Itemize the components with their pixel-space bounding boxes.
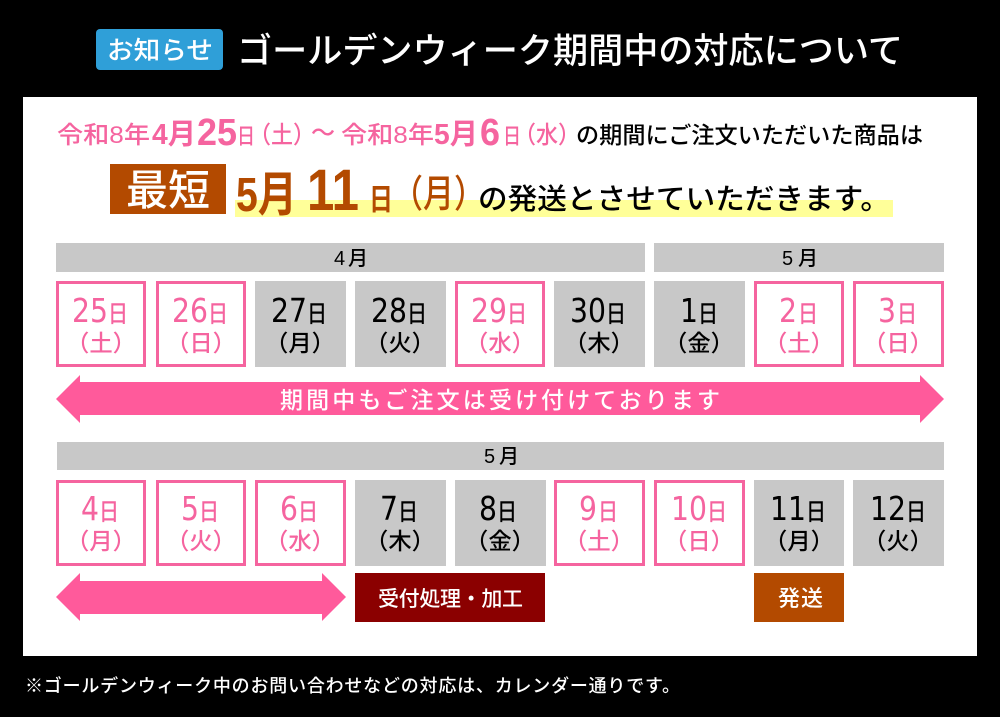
text: shipping date line: （月） (392, 174, 485, 216)
day: 25: 日 (108, 301, 128, 328)
text: shipping date line (236, 158, 890, 223)
arrow: May 4 to 6 (56, 573, 346, 621)
day: 28 (355, 281, 446, 367)
day: 5: （火） (166, 528, 236, 554)
day: 28: 28 (371, 291, 407, 330)
text: order period line: 5月 (434, 119, 478, 151)
day: 4: （月） (66, 528, 136, 554)
day: 10 (656, 482, 744, 564)
text: shipping date line: 日 (369, 184, 393, 217)
text: shipping date line: 11 (307, 158, 359, 223)
day: 27: 日 (307, 301, 327, 328)
month header: May second row: 5月 (484, 446, 519, 468)
day: 29: 29 (471, 291, 507, 330)
text: order period line: （水） (514, 122, 580, 149)
box: processing: 受付処理・加工 (378, 588, 523, 611)
day: 26 (158, 282, 244, 366)
day: 25 (58, 282, 144, 366)
highlight band (235, 200, 893, 217)
day: 10: 日 (707, 499, 727, 526)
day: 6: 6 (280, 489, 298, 528)
day: 1: （金） (664, 330, 734, 356)
day: 4: 4 (81, 489, 99, 528)
day: 11 (754, 480, 844, 566)
day: 4: 日 (99, 499, 119, 526)
day: 1: 1 (680, 291, 698, 330)
text: order period line: 6 (480, 112, 500, 154)
text: order period line: 令和8年 (341, 122, 434, 149)
day: 12: 12 (870, 489, 906, 528)
day: 30 (554, 281, 645, 367)
badge: お知らせ (96, 29, 223, 70)
day: 10: （日） (664, 528, 734, 554)
day: 12: （火） (863, 528, 933, 554)
title: ゴールデンウィーク期間中の対応について (237, 32, 903, 71)
text: order period line: 令和8年 (57, 122, 150, 149)
text: shipping date line: 5月 (236, 169, 297, 222)
text: order period line: 日 (503, 124, 521, 149)
day: 3: 日 (897, 301, 917, 328)
text: order period line: （土） (249, 122, 315, 149)
text: order period line: ～ (311, 120, 335, 147)
day: 9: 日 (598, 499, 618, 526)
day: 27: （月） (265, 330, 335, 356)
day: 8: （金） (465, 528, 535, 554)
day: 8: 8 (479, 489, 497, 528)
day: 29: 日 (507, 301, 527, 328)
arrow: orders accepted during period: 期間中もご注文は受け付けております (280, 387, 720, 413)
month header: May (654, 243, 944, 272)
day: 27: 27 (271, 291, 307, 330)
month header: April (56, 243, 645, 272)
box: processing (355, 573, 545, 622)
day: 7: （木） (365, 528, 435, 554)
day: 30: 日 (606, 301, 626, 328)
day: 2 (756, 282, 842, 366)
day: 10: 10 (671, 489, 707, 528)
text: shipping date line: の発送とさせていただきます。 (478, 183, 890, 216)
day: 2: （土） (764, 330, 834, 356)
day: 25: （土） (66, 330, 136, 356)
text: order period line: 4月 (152, 119, 196, 151)
day: 8: 日 (497, 499, 517, 526)
day: 3 (854, 282, 942, 366)
day: 9: （土） (564, 528, 634, 554)
day: 11: 11 (770, 489, 806, 528)
month header: May: 5月 (782, 248, 818, 270)
day: 26: 日 (208, 301, 228, 328)
day: 6: （水） (265, 528, 335, 554)
day: 30: 30 (570, 291, 606, 330)
day: 28: （火） (365, 330, 435, 356)
day: 2: 2 (779, 291, 797, 330)
day: 28: 日 (407, 301, 427, 328)
day: 25: 25 (72, 291, 108, 330)
day: 30: （木） (564, 330, 634, 356)
box: shipping: 発送 (778, 586, 823, 611)
panel: white content (23, 97, 977, 656)
day: 3: （日） (863, 330, 933, 356)
arrow: orders accepted during period (56, 375, 944, 423)
day: 6: 日 (298, 499, 318, 526)
day: 5 (158, 482, 244, 564)
day: 7: 日 (398, 499, 418, 526)
day: 8 (455, 480, 546, 566)
badge: 最短: 最短 (126, 167, 210, 214)
day: 29 (456, 282, 544, 366)
text: order period line: 日 (237, 124, 255, 149)
day: 5: 5 (181, 489, 199, 528)
day: 4 (58, 482, 144, 564)
day: 27 (255, 281, 346, 367)
month header: May second row (57, 442, 944, 470)
day: 7: 7 (380, 489, 398, 528)
day: 26: （日） (166, 330, 236, 356)
day: 1 (654, 281, 745, 367)
day: 9 (556, 482, 644, 564)
day: 12: 日 (906, 499, 926, 526)
text: order period line (57, 112, 923, 154)
day: 1: 日 (698, 301, 718, 328)
day: 5: 日 (199, 499, 219, 526)
day: 26: 26 (172, 291, 208, 330)
day: 11: （月） (764, 528, 834, 554)
day: 7 (355, 480, 446, 566)
badge: お知らせ: お知らせ (107, 37, 213, 65)
month header: April: 4月 (334, 248, 368, 270)
day: 12 (853, 480, 944, 566)
badge: 最短 (110, 164, 226, 214)
day: 9: 9 (579, 489, 597, 528)
day: 29: （水） (465, 330, 535, 356)
text: order period line: の期間にご注文いただいた商品は (576, 122, 923, 148)
day: 2: 日 (798, 301, 818, 328)
day: 3: 3 (878, 291, 896, 330)
footer note: ※ゴールデンウィーク中のお問い合わせなどの対応は、カレンダー通りです。 (25, 675, 680, 696)
day: 6 (256, 482, 344, 564)
box: shipping (754, 573, 844, 622)
text: order period line: 25 (197, 112, 237, 154)
day: 11: 日 (806, 499, 826, 526)
